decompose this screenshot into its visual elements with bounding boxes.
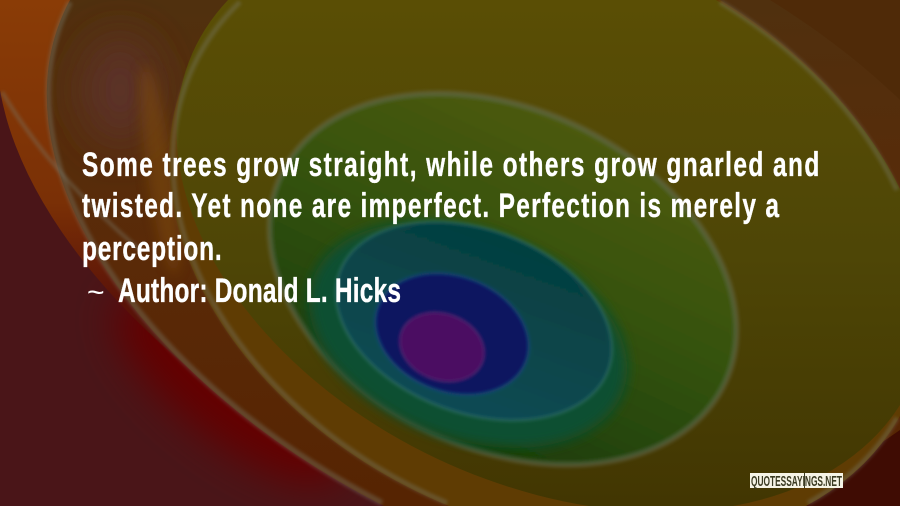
author line: Author: Donald L. Hicks [118, 272, 401, 310]
quote text [82, 146, 819, 268]
author line: ~ [87, 276, 105, 309]
quote text: Some trees grow straight, while others grow gnarled and [82, 146, 819, 184]
quote text: twisted. Yet none are imperfect. Perfection is merely a [82, 187, 779, 225]
quote text: perception. [82, 230, 222, 268]
watermark [750, 473, 843, 490]
